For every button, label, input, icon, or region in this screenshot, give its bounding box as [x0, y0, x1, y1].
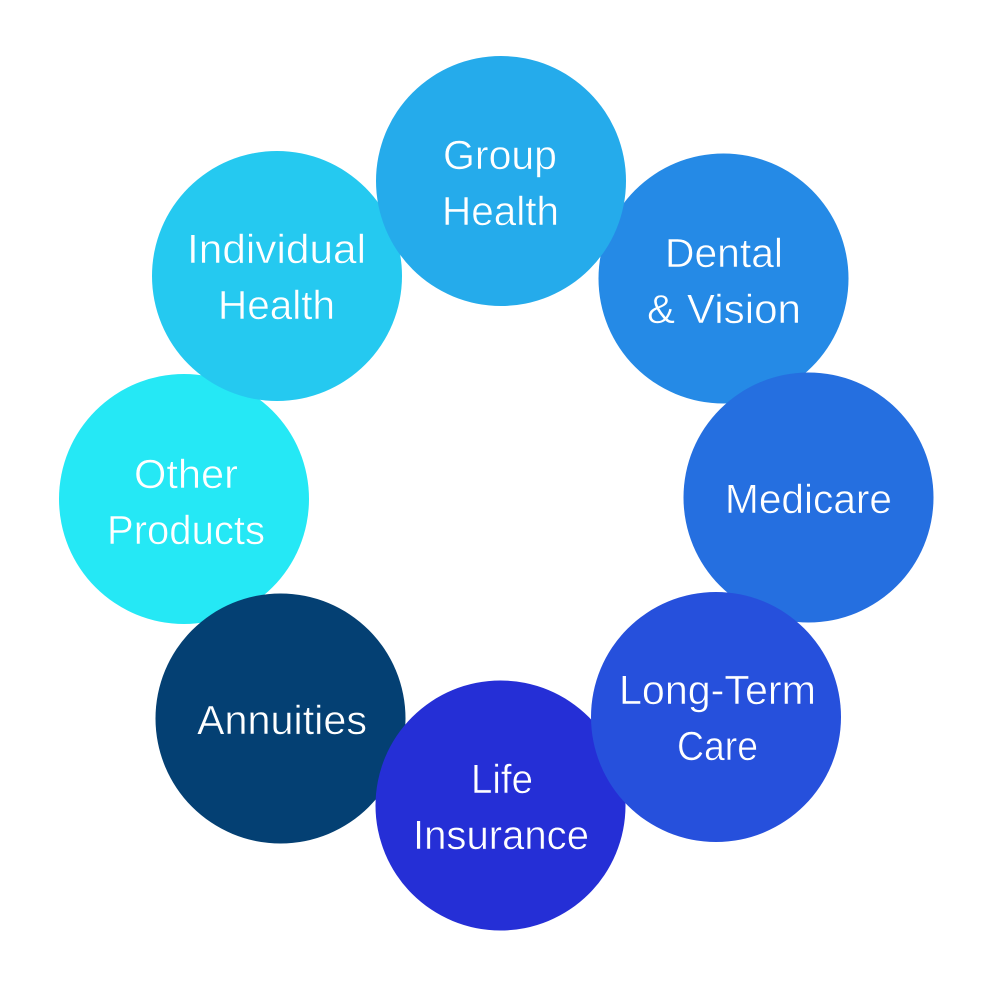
circle: Individual Health [152, 151, 402, 401]
circle: Group Health [376, 56, 626, 306]
circle: Other Products [59, 374, 309, 624]
circle: Life Insurance: Life [471, 756, 533, 802]
circle: Group Health: Health [442, 188, 559, 234]
circle: Individual Health: Health [218, 282, 335, 328]
circle: Life Insurance [376, 680, 626, 930]
circle: Medicare [684, 372, 934, 622]
circle: Other Products: Products [107, 507, 265, 553]
circle: Group Health: Group [443, 132, 557, 178]
circle: Annuities: Annuities [197, 697, 367, 743]
circle: Dental & Vision: Dental [665, 230, 783, 276]
circle: Long-Term Care: Long-Term [619, 667, 816, 713]
circle: Long-Term Care: Care [677, 723, 758, 769]
circle: Other Products: Other [134, 451, 238, 497]
circle: Long-Term Care [591, 592, 841, 842]
circle: Dental & Vision [598, 154, 848, 404]
circle: Annuities [156, 594, 406, 844]
circle: Life Insurance: Insurance [413, 812, 589, 858]
circle: Dental & Vision: & Vision [647, 286, 801, 332]
circle: Medicare: Medicare [725, 476, 892, 522]
circle: Individual Health: Individual [187, 226, 366, 272]
